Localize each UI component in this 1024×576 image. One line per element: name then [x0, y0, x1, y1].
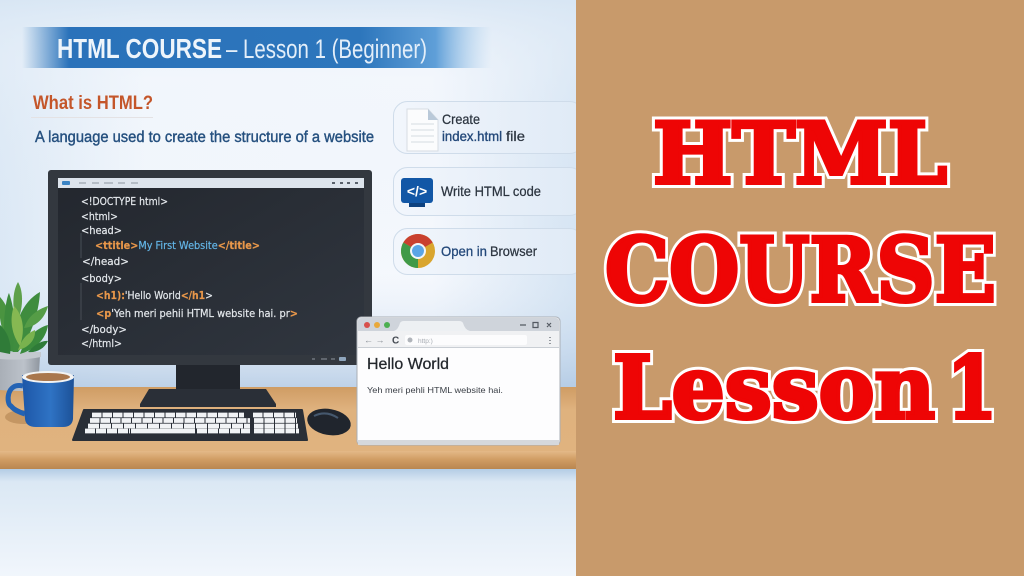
- heading: COURSE: COURSE: [605, 218, 996, 322]
- code listing: <ttitle>My First Website</title>: [95, 240, 260, 252]
- icon: browser logo: [401, 234, 435, 268]
- heading: Lesson 1: 1: [947, 338, 997, 439]
- browser window: Yeh meri pehli HTML website hai.: [367, 385, 503, 395]
- browser window: [357, 317, 560, 445]
- monitor stand: [140, 362, 276, 407]
- heading: What is HTML?: What is HTML?: [33, 93, 153, 114]
- heading: HTML: HTML: [653, 104, 947, 203]
- code listing: <p'Yeh meri pehii HTML website hai. pr>: [96, 308, 298, 320]
- code listing: <html>: [81, 211, 118, 223]
- code listing: </html>: [81, 338, 122, 350]
- heading: COURSE: COURSE: [605, 218, 996, 322]
- step card: open browser: [394, 228, 584, 274]
- icon: coffee mug: [5, 371, 74, 427]
- text: definition: A language used to create the structure of a website: [35, 129, 374, 146]
- code listing: </head>: [82, 256, 129, 268]
- browser window: ← →: [364, 335, 385, 345]
- step card: create file: file: [506, 128, 525, 144]
- panel: lesson illustration: [0, 0, 584, 576]
- heading: Lesson 1: Lesson: [613, 338, 935, 439]
- step card: open browser: Browser: [490, 243, 537, 259]
- icon: plant: [0, 282, 48, 391]
- step card: write code: [394, 168, 584, 216]
- step card: create file: Create: [442, 111, 480, 127]
- browser window: http:): [418, 338, 433, 345]
- step card: create file: [394, 102, 584, 154]
- icon: code monitor: </>: [407, 183, 427, 199]
- step card: write code: Write HTML code: [441, 183, 541, 199]
- heading: Lesson 1: 1: [947, 338, 997, 439]
- step card: open browser: Open in: [441, 243, 487, 259]
- monitor: [48, 170, 372, 407]
- panel: course title: [576, 0, 1024, 576]
- browser window: Hello World: [367, 356, 449, 373]
- code listing: <body>: [81, 273, 122, 285]
- step card: create file: index.html: [442, 128, 502, 144]
- heading: HTML: HTML: [653, 104, 947, 203]
- code listing: <head>: [81, 225, 122, 237]
- icon: document: [407, 109, 438, 151]
- title banner: – Lesson 1 (Beginner): [226, 34, 427, 64]
- desk: [0, 387, 576, 576]
- code listing: <!DOCTYPE html>: [81, 196, 168, 208]
- code listing: [81, 196, 298, 350]
- icon: mouse: [305, 405, 353, 439]
- code listing: </body>: [81, 324, 127, 336]
- title banner: [22, 27, 492, 68]
- keyboard: [73, 410, 307, 440]
- title banner: HTML COURSE: [57, 33, 222, 64]
- browser window: C: [392, 336, 399, 346]
- heading: Lesson 1: Lesson: [613, 338, 935, 439]
- icon: code monitor: [401, 178, 433, 207]
- code listing: <h1):'Hello World</h1>: [96, 290, 213, 302]
